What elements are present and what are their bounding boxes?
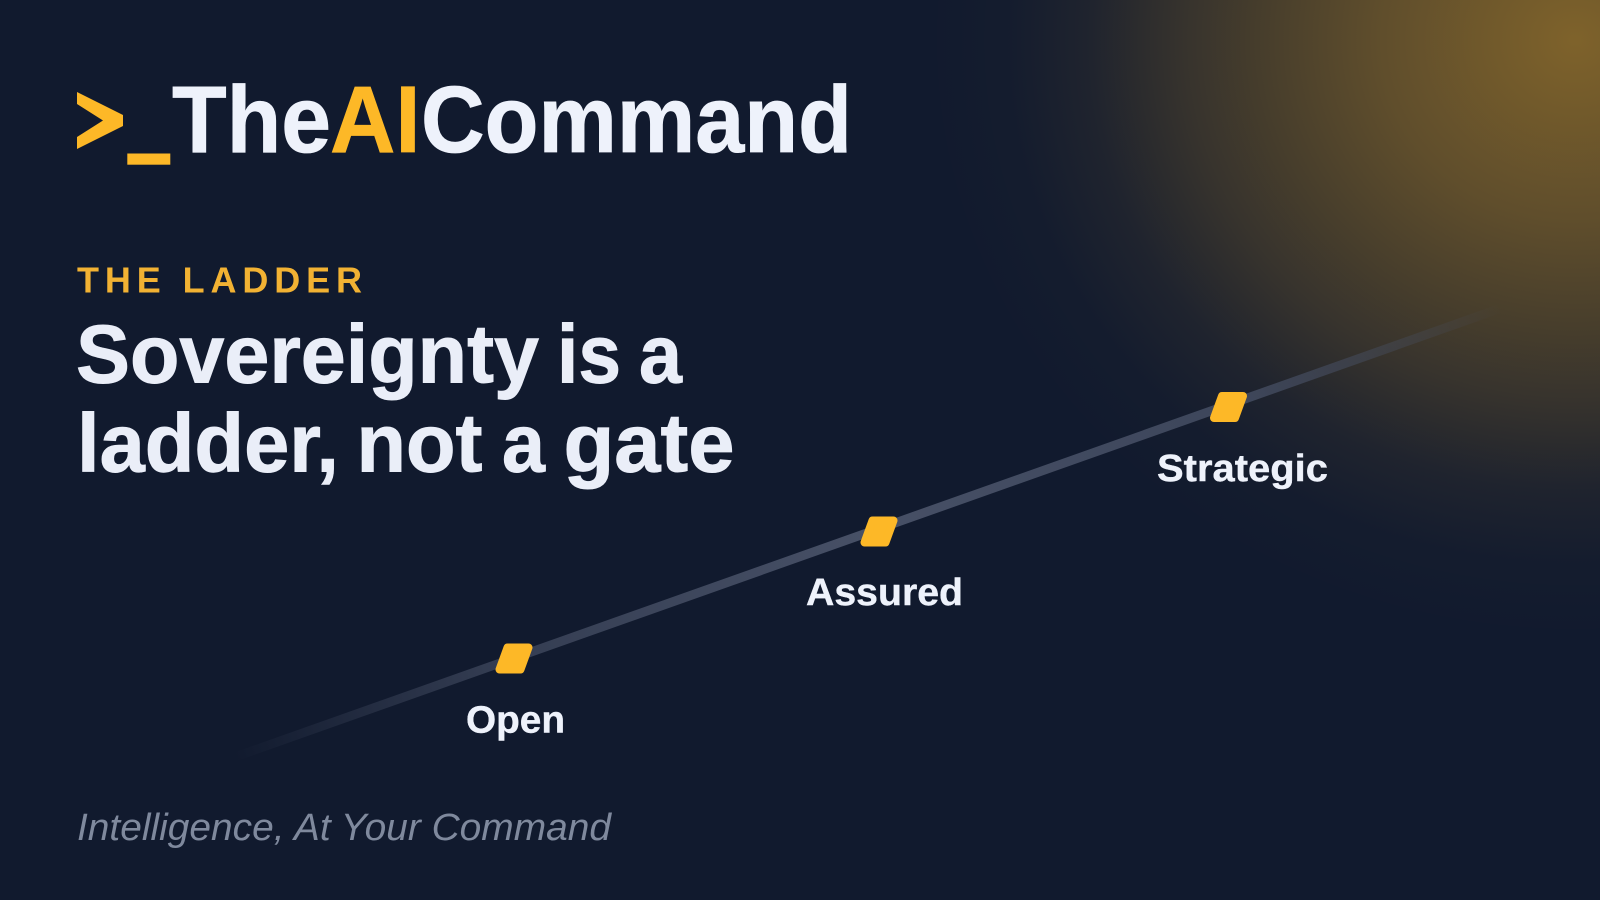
rung: Open	[466, 648, 565, 742]
headline: a	[502, 396, 546, 490]
marker	[500, 648, 528, 670]
headline: ladder,	[77, 396, 339, 490]
label: Assured	[806, 572, 963, 614]
icon: terminal prompt	[77, 92, 170, 165]
marker	[1214, 396, 1243, 418]
tagline: Intelligence, At Your Command	[77, 807, 613, 849]
ladder rail	[235, 308, 1500, 757]
rung: Strategic	[1157, 396, 1328, 490]
label: Strategic	[1157, 448, 1328, 490]
wordmark: Command	[421, 67, 852, 173]
rung: Assured	[806, 520, 963, 614]
marker	[864, 520, 894, 542]
corner glow	[900, 0, 1600, 660]
headline: gate	[564, 396, 734, 490]
headline: is	[557, 308, 621, 400]
eyebrow: THE LADDER	[77, 260, 362, 300]
logo	[77, 67, 852, 173]
wordmark: The	[172, 67, 331, 173]
wordmark: AI	[330, 67, 420, 173]
headline	[76, 308, 734, 490]
headline: a	[639, 308, 683, 400]
wordmark	[172, 67, 852, 173]
headline: Sovereignty	[76, 308, 539, 400]
label: Open	[466, 700, 565, 742]
headline: not	[356, 396, 482, 490]
